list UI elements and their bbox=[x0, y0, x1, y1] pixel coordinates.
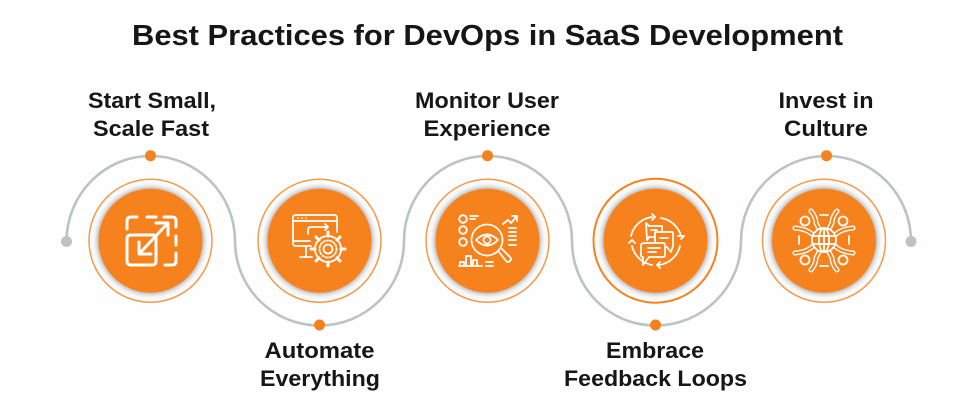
label: Automate bbox=[264, 338, 374, 363]
label: Culture bbox=[784, 116, 868, 141]
marker dot bbox=[314, 320, 325, 330]
endpoint: right bbox=[906, 236, 916, 247]
label bbox=[415, 88, 559, 141]
orange disc bbox=[604, 189, 708, 293]
title: Best Practices for DevOps in SaaS Development bbox=[132, 20, 843, 52]
icon: chat loop bbox=[629, 214, 684, 268]
label: Monitor User bbox=[415, 88, 559, 113]
label: Embrace bbox=[606, 338, 704, 363]
step 1: Start Small, Scale Fast bbox=[88, 88, 216, 302]
step 2: Automate Everything bbox=[258, 179, 381, 391]
orange disc bbox=[98, 189, 202, 293]
label: Invest in bbox=[778, 88, 874, 113]
label bbox=[260, 338, 380, 391]
label: Experience bbox=[424, 116, 550, 141]
label: Start Small, bbox=[88, 88, 216, 113]
marker dot bbox=[145, 150, 156, 161]
orange disc bbox=[436, 189, 540, 293]
icon: people around globe bbox=[795, 211, 853, 270]
outer ring bbox=[89, 179, 212, 302]
orange disc bbox=[268, 189, 372, 293]
marker dot bbox=[482, 150, 493, 161]
icon: monitor and gear bbox=[293, 215, 345, 266]
globe and heads bbox=[799, 215, 849, 266]
arm outlines bbox=[795, 211, 853, 270]
marker dot bbox=[650, 320, 661, 330]
label bbox=[564, 338, 747, 391]
label bbox=[88, 88, 216, 141]
label: Scale Fast bbox=[93, 116, 210, 141]
connector path bbox=[66, 156, 911, 326]
outer ring bbox=[258, 179, 381, 302]
outer ring bbox=[594, 179, 718, 303]
icon: eye in magnifier bbox=[459, 215, 517, 266]
outer ring bbox=[762, 179, 886, 302]
step 4: Embrace Feedback Loops bbox=[564, 179, 747, 391]
orange disc bbox=[772, 189, 876, 293]
label bbox=[778, 88, 874, 141]
endpoint: left bbox=[61, 236, 72, 247]
step 3: Monitor User Experience bbox=[415, 88, 559, 302]
marker dot bbox=[821, 150, 832, 161]
label: Feedback Loops bbox=[564, 366, 747, 391]
icon: expand arrow bbox=[127, 217, 176, 265]
step 5: Invest in Culture bbox=[762, 88, 886, 302]
arm interiors bbox=[795, 211, 853, 270]
outer ring bbox=[426, 179, 549, 302]
label: Everything bbox=[260, 366, 380, 391]
